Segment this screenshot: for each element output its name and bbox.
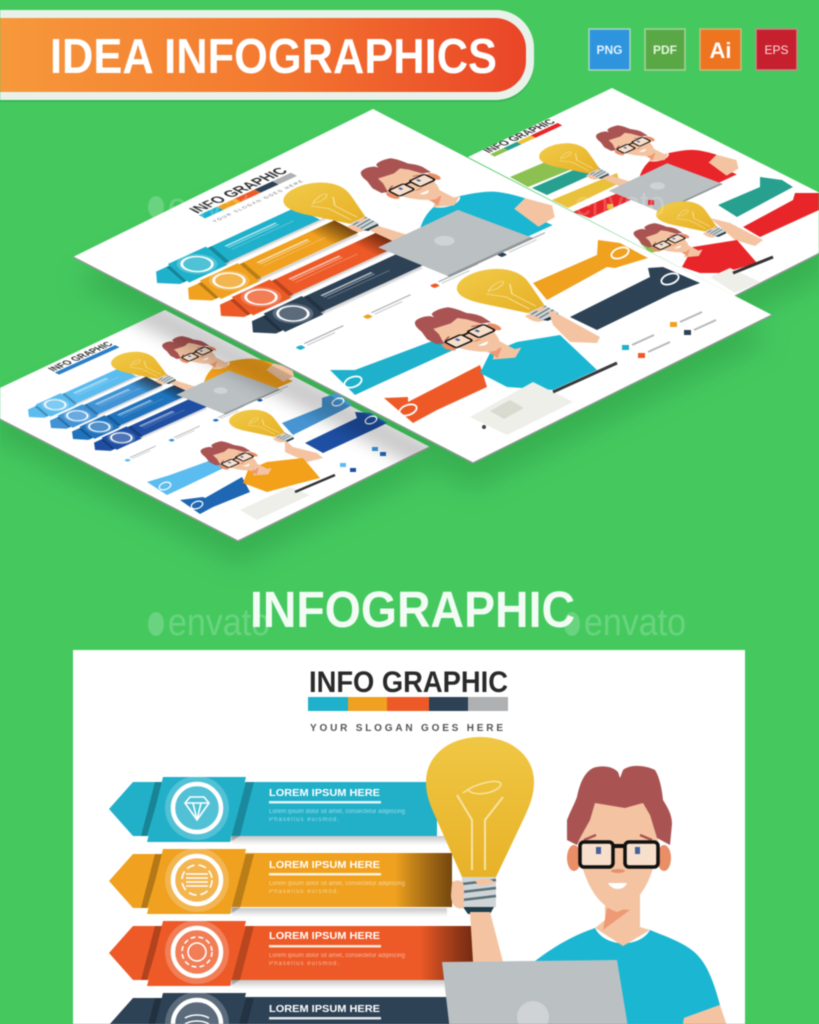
text: row 2: Lorem ipsum dolor sit amet, consectetur adipiscing: [269, 881, 405, 887]
icon: PDF: PDF: [653, 43, 677, 57]
text: row 1: LOREM IPSUM HERE: [269, 788, 380, 799]
bulb lower: [443, 262, 581, 330]
bulb upper: [271, 176, 399, 240]
slide shadows: [0, 135, 819, 565]
person lower: [402, 302, 617, 435]
text: row 3: Phasellus euismod.: [269, 961, 339, 967]
legend lower: [340, 447, 386, 472]
text: row 3: LOREM IPSUM HERE: [269, 931, 380, 942]
icon: light bulb: [426, 737, 534, 914]
legend dots: [606, 199, 655, 210]
text: row 2: Phasellus euismod.: [269, 889, 339, 895]
slide title: INFO GRAPHIC: [186, 166, 292, 216]
strips: lower rows: [640, 177, 819, 253]
strips: lower rows: [330, 240, 700, 423]
text: row 2: [269, 860, 405, 895]
slide: front main layout: [73, 109, 772, 463]
strips: lower rows: [147, 393, 387, 514]
heading: idea infographics: IDEA INFOGRAPHICS: [50, 30, 497, 84]
strips: upper rows: [142, 198, 436, 341]
person upper: [595, 124, 739, 211]
slide: blue and orange lower-left layout: [0, 310, 430, 541]
slogan: YOUR SLOGAN GOES HERE: [310, 723, 503, 734]
text: row 4: LOREM IPSUM HERE: [269, 1004, 380, 1015]
slide title: YOUR SLOGAN GOES HERE: [211, 179, 306, 223]
legend: [124, 386, 291, 462]
text: row 1: [269, 788, 405, 823]
text: row 3: Lorem ipsum dolor sit amet, consectetur adipiscing: [269, 953, 405, 959]
person lower: [625, 218, 773, 293]
icon: diamond: [185, 797, 209, 820]
icon: EPS: [756, 29, 797, 70]
heading: infographic: INFOGRAPHIC: [250, 581, 575, 638]
icon: PNG: [589, 29, 630, 70]
bulb upper: [538, 142, 610, 180]
text: row 2: LOREM IPSUM HERE: [269, 860, 380, 871]
bulb lower: [221, 406, 307, 448]
watermarks: envato: [584, 602, 686, 644]
icon: EPS: EPS: [764, 43, 789, 57]
icon: lines: [182, 865, 212, 895]
strips: upper rows: [510, 162, 631, 219]
panel: flat infographic preview: [73, 650, 745, 1024]
strips: upper rows: [19, 362, 216, 456]
icon: circular arrows: [185, 1015, 209, 1024]
bulb lower: [655, 200, 727, 238]
watermarks: envato: [575, 185, 665, 223]
person upper: [291, 140, 577, 280]
shadow of front slide on lower slide: [129, 310, 430, 464]
slide: red and green back layout: [468, 88, 819, 296]
icon: gear: [182, 937, 212, 967]
text: row 4: [269, 1004, 381, 1020]
person upper: [116, 325, 309, 417]
strip text lines: [224, 217, 390, 299]
watermarks: envato: [168, 187, 270, 225]
icon: Ai: Ai: [710, 38, 732, 63]
icon: PNG: PNG: [596, 43, 623, 57]
person lower: [192, 438, 335, 520]
title: INFO GRAPHIC: [309, 666, 508, 699]
bulb upper: [103, 348, 189, 390]
laptop: [442, 960, 641, 1024]
colour bar: [308, 697, 508, 711]
person: shirt and arms: [470, 912, 735, 1024]
strips art: [109, 776, 473, 1024]
slide title: INFO GRAPHIC: [46, 340, 117, 373]
legend: [295, 232, 550, 350]
icon: PDF: [645, 29, 685, 70]
legend lower: [622, 312, 716, 358]
text: row 1: Lorem ipsum dolor sit amet, consectetur adipiscing: [269, 809, 405, 815]
format icons: [589, 29, 797, 70]
text: row 1: Phasellus euismod.: [269, 817, 339, 823]
text: row 3: [269, 931, 405, 967]
slide title: INFO GRAPHIC: [481, 118, 559, 155]
strip text lines: [73, 374, 185, 429]
icon: Ai: [700, 29, 741, 70]
banner: title pill: [0, 10, 534, 102]
watermarks: [148, 185, 686, 644]
watermarks: envato: [168, 602, 270, 644]
person: head with glasses: [567, 766, 672, 946]
